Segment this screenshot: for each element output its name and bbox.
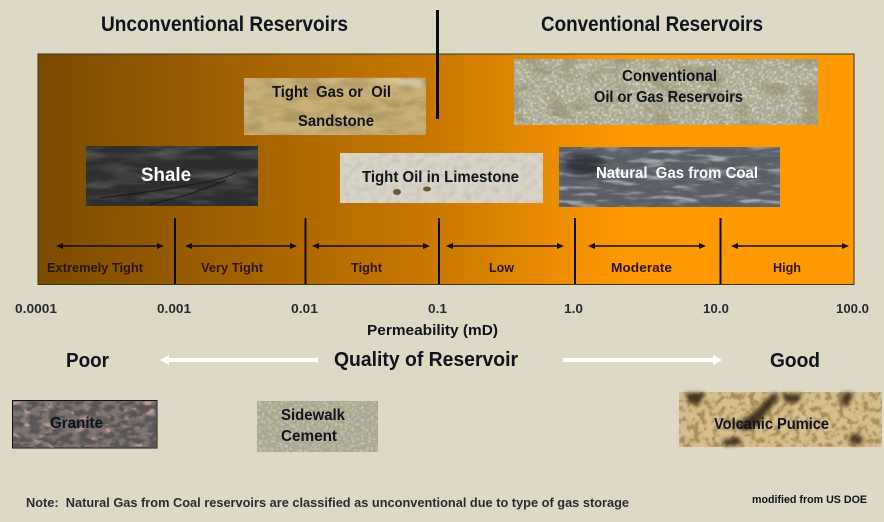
rock sample: conventional oil or gas reservoirs: Oil or Gas Reservoirs <box>594 89 743 106</box>
label: poor: Poor <box>66 350 109 372</box>
rock sample: volcanic pumice <box>679 392 882 447</box>
heading: unconventional reservoirs: Unconventional Reservoirs <box>101 13 348 36</box>
heading: conventional reservoirs: Conventional Reservoirs <box>541 13 763 36</box>
rock sample: tight gas or oil sandstone: Tight Gas or Oil <box>272 84 391 101</box>
rock sample: tight gas or oil sandstone: Sandstone <box>298 113 374 130</box>
rock sample: tight gas or oil sandstone <box>244 78 426 135</box>
permeability scale values: 0.01 <box>291 302 318 316</box>
permeability scale values: 100.0 <box>836 302 869 316</box>
permeability scale values: 0.1 <box>428 302 447 316</box>
label: good: Good <box>770 350 820 372</box>
rock sample: tight oil in limestone: Tight Oil in Limestone <box>362 169 519 186</box>
band labels: Tight <box>351 260 383 275</box>
rock sample: conventional oil or gas reservoirs: Conventional <box>622 68 717 85</box>
permeability scale values: 0.0001 <box>15 302 57 316</box>
rock sample: granite <box>12 400 157 448</box>
permeability scale values: 1.0 <box>564 302 583 316</box>
rock sample: granite: Granite <box>50 415 103 432</box>
heading: quality of reservoir: Quality of Reservoir <box>334 349 518 371</box>
band labels: Low <box>489 260 515 275</box>
permeability scale values: 10.0 <box>703 302 729 316</box>
arrow: towards poor <box>160 355 318 365</box>
permeability scale values: 0.001 <box>157 302 191 316</box>
band arrows <box>56 243 849 249</box>
band labels <box>47 260 801 275</box>
divider: unconventional vs conventional <box>436 10 439 119</box>
rock sample: natural gas from coal <box>559 147 780 207</box>
rock sample: conventional oil or gas reservoirs <box>514 59 818 125</box>
rock sample: shale: Shale <box>141 165 191 186</box>
arrow: towards good <box>563 355 722 365</box>
band labels: Very Tight <box>201 260 264 275</box>
panel: permeability gradient <box>38 10 854 284</box>
rock sample: sidewalk cement <box>257 401 378 452</box>
rock sample: shale <box>86 146 258 206</box>
band labels: Moderate <box>611 260 672 275</box>
permeability band dividers <box>174 218 722 284</box>
rock sample: tight oil in limestone <box>340 153 543 203</box>
rock sample: volcanic pumice: Volcanic Pumice <box>714 416 829 433</box>
rock sample: sidewalk cement: Cement <box>281 428 337 445</box>
permeability scale values <box>15 302 869 316</box>
band labels: High <box>773 260 801 275</box>
axis title: permeability: Permeability (mD) <box>367 322 498 339</box>
footnote: Note: Natural Gas from Coal reservoirs are classified as unconventional due to type of gas storage <box>26 495 629 510</box>
rock sample: natural gas from coal: Natural Gas from Coal <box>596 165 758 182</box>
band labels: Extremely Tight <box>47 260 144 275</box>
rock sample: sidewalk cement: Sidewalk <box>281 407 345 424</box>
source credit: modified from US DOE <box>752 494 867 506</box>
